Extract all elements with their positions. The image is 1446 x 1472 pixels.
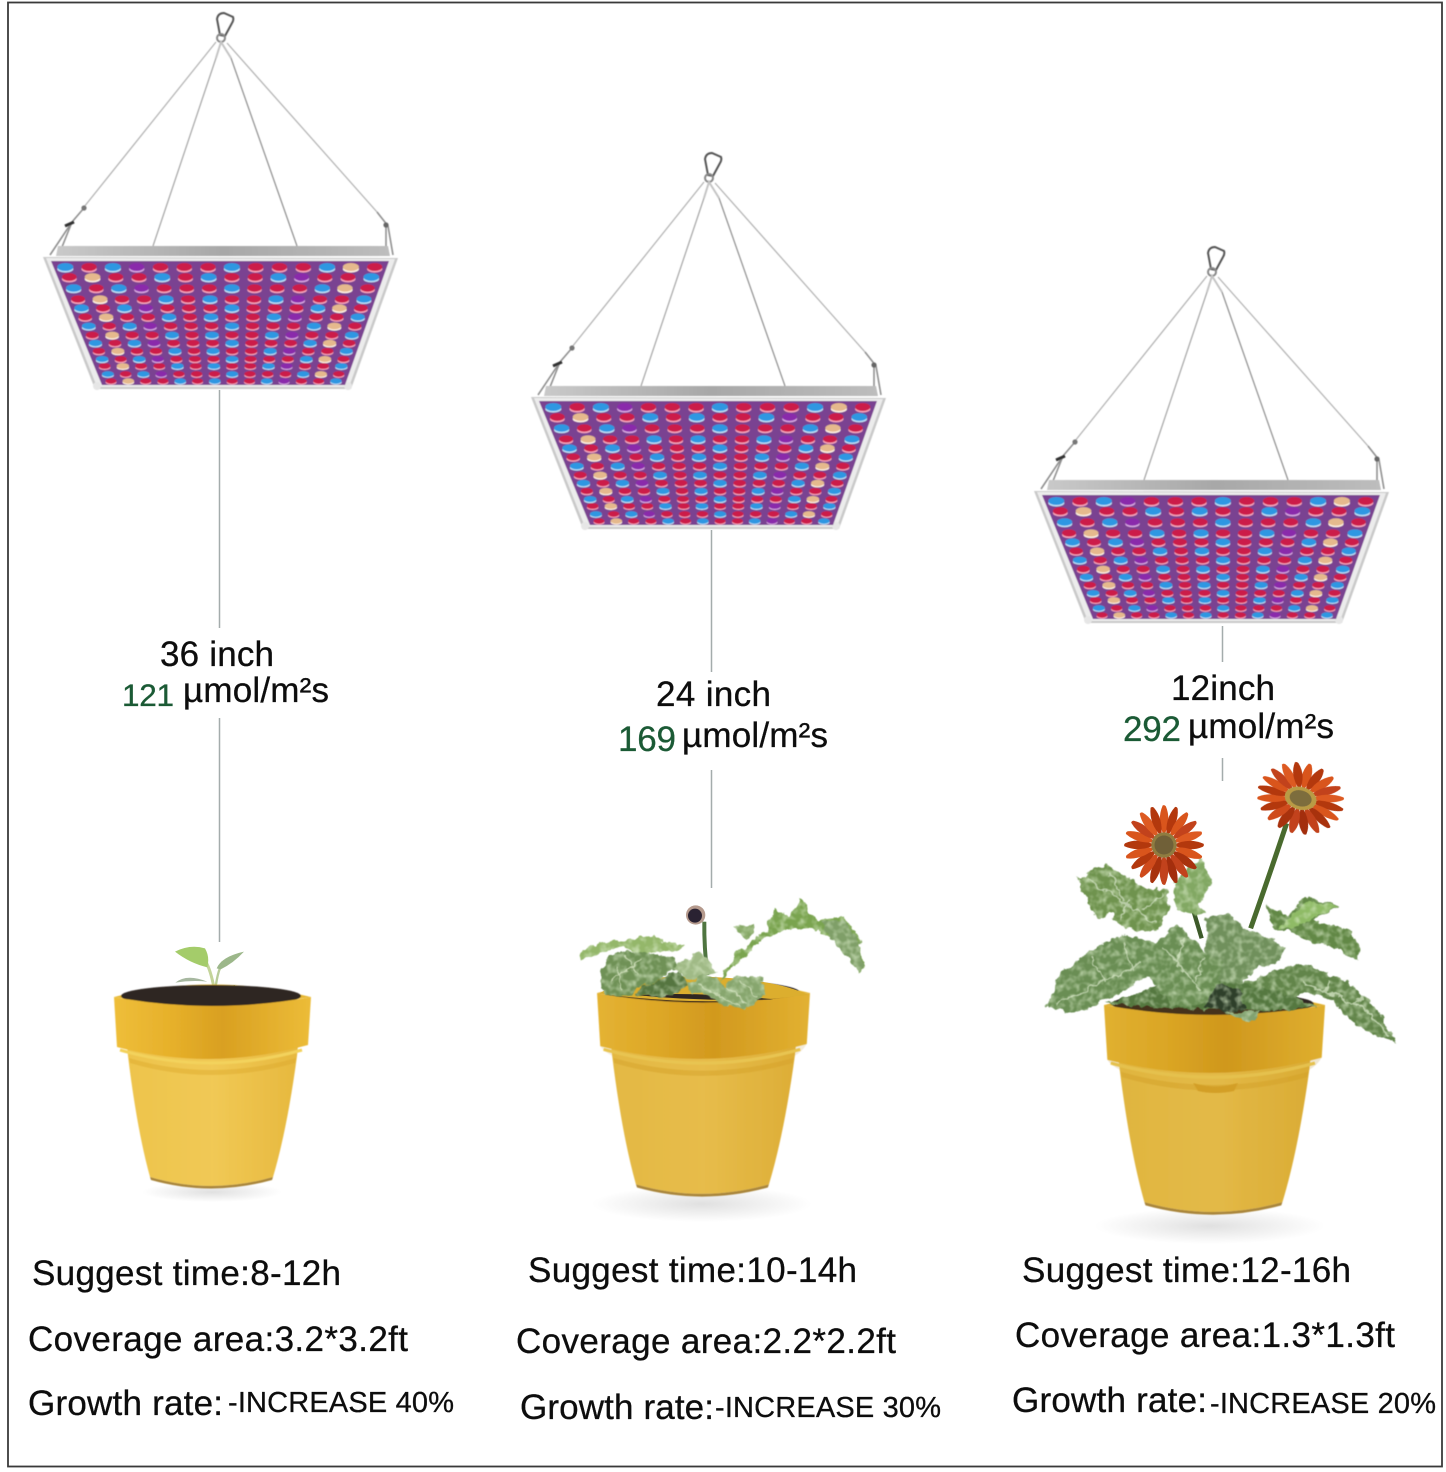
label: 36 inch unit: µmol/m²s <box>183 671 329 710</box>
bud stem <box>704 922 707 975</box>
measuring line: 12 inch <box>1222 626 1224 781</box>
label: 36 inch distance: 36 inch <box>160 635 274 674</box>
label: 12 inch distance: 12inch <box>1171 669 1275 708</box>
growth rate: 36 inch: Growth rate: <box>28 1384 223 1423</box>
label: 121 PPFD value: 121 <box>122 677 174 713</box>
growth rate: 24 inch: Growth rate: <box>520 1388 714 1427</box>
flower left <box>1124 805 1204 885</box>
pot 1 <box>114 984 311 1188</box>
label: 169 PPFD value: 169 <box>618 720 676 759</box>
suggest time: 24 inch: Suggest time:10-14h <box>528 1251 857 1290</box>
label: 24 inch distance: 24 inch <box>656 675 771 714</box>
pot 3 <box>1104 991 1325 1215</box>
bud <box>686 905 705 925</box>
label: 292 PPFD value: 292 <box>1123 710 1181 749</box>
coverage area: 12 inch: Coverage area:1.3*1.3ft <box>1015 1316 1395 1355</box>
lamp: 36 inch panel <box>43 13 398 390</box>
pot 2 shadow <box>592 1186 812 1222</box>
coverage area: 36 inch: Coverage area:3.2*3.2ft <box>28 1320 408 1359</box>
growth rate: 12 inch: Growth rate: <box>1012 1381 1207 1420</box>
plant 1: seedling <box>175 947 244 993</box>
back rim and soil strip <box>600 977 808 1001</box>
measuring line: 24 inch <box>710 530 712 888</box>
stems <box>1183 823 1287 938</box>
plant 2: leaves and bud <box>578 898 865 1010</box>
suggest time: 36 inch: Suggest time:8-12h <box>32 1254 341 1293</box>
pot 2 <box>597 980 810 1197</box>
label: 12 inch unit: µmol/m²s <box>1188 707 1334 746</box>
lamp: 12 inch panel <box>1034 247 1389 624</box>
pot 3 shadow <box>1095 1208 1325 1244</box>
lamp: 24 inch panel <box>531 153 886 530</box>
plant 3: gerbera with flowers and leaves <box>1047 752 1395 1042</box>
growth increase: 20%: -INCREASE 20% <box>1210 1388 1436 1420</box>
pot 3 glaze patch <box>1193 1083 1238 1093</box>
coverage area: 24 inch: Coverage area:2.2*2.2ft <box>516 1322 896 1361</box>
growth increase: 40%: -INCREASE 40% <box>228 1387 454 1419</box>
pot 1 shadow <box>142 1182 282 1202</box>
leaves <box>578 898 865 1010</box>
measuring line: 36 inch <box>218 390 220 942</box>
suggest time: 12 inch: Suggest time:12-16h <box>1022 1251 1351 1290</box>
label: 24 inch unit: µmol/m²s <box>682 716 828 755</box>
leaves <box>1047 857 1395 1042</box>
soil strip <box>635 994 773 1000</box>
flower right <box>1249 752 1352 844</box>
growth increase: 30%: -INCREASE 30% <box>715 1392 941 1424</box>
